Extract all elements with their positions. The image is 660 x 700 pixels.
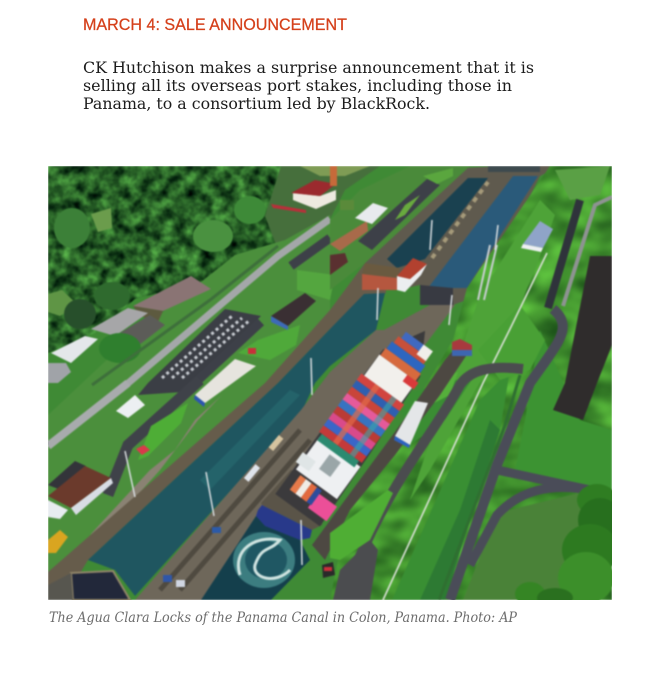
container rows [319, 374, 404, 463]
forward containers [380, 328, 436, 381]
right side roads and parking [312, 197, 612, 600]
lock wall and lower left chamber [48, 262, 386, 600]
container ship [256, 330, 434, 540]
trees lower right [515, 484, 612, 600]
body text: Panama, to a consortium led by BlackRock. [83, 94, 430, 113]
containers near stern [287, 475, 339, 521]
water swirl below the ship [201, 516, 310, 600]
central dividing wall [135, 305, 455, 600]
body text: selling all its overseas port stakes, including those in [83, 76, 512, 95]
white container block [364, 355, 417, 403]
photo: aerial view of the Agua Clara Locks [48, 166, 622, 608]
lock gates and central roofed building [362, 258, 453, 305]
bridge superstructure [292, 431, 363, 499]
forest [48, 166, 281, 363]
body text: CK Hutchison makes a surprise announcement that it is [83, 58, 534, 77]
right side green banks [330, 166, 612, 600]
floodlight poles [125, 220, 498, 565]
left side buildings and parking [48, 215, 335, 590]
top-centre grounds and red-roofed building [265, 166, 380, 250]
upper lock chambers [365, 166, 560, 305]
caption: The Agua Clara Locks of the Panama Canal in Colon, Panama. Photo: AP [49, 610, 518, 626]
body text [83, 58, 534, 113]
bottom lock gate [48, 571, 130, 600]
upper left buildings [330, 166, 470, 290]
heading: March 4 sale announcement: MARCH 4: SALE ANNOUNCEMENT [83, 16, 347, 34]
